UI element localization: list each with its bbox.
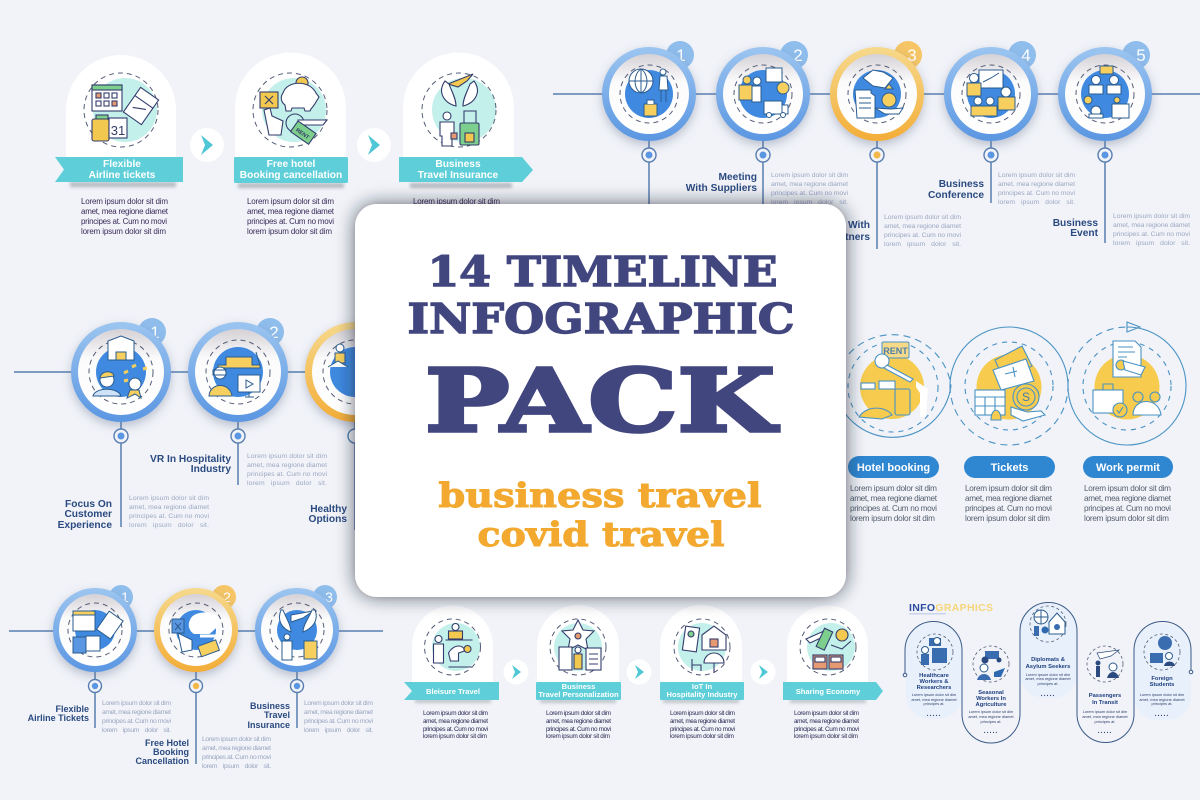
panel: bottom-left airline timeline <box>9 585 383 770</box>
panel: bottom-centre arch timeline <box>404 605 883 740</box>
text block <box>1113 213 1190 247</box>
title: Diplomats & <box>1031 657 1065 663</box>
text block <box>1084 484 1172 523</box>
text block: lorem ipsum dolor sit dim <box>794 733 858 740</box>
text block: amet, mea regione diamet <box>998 181 1075 188</box>
label: Customer <box>64 509 112 520</box>
arrow: play marker <box>1127 322 1140 332</box>
panel: bottom-right infographics capsules <box>903 602 1193 743</box>
ribbon: Business Travel Personalization: Travel Personalization <box>538 690 619 699</box>
body: amet, mea regione diamet <box>1025 676 1072 681</box>
column: Diplomats & Asylum Seekers <box>1025 606 1072 698</box>
arrow: chevron <box>504 660 528 684</box>
text block <box>129 495 209 529</box>
connector stems <box>95 672 297 764</box>
text block: Lorem ipsum dolor sit dim <box>247 453 327 460</box>
text block: Lorem ipsum dolor sit dim <box>202 736 271 743</box>
ribbon: IoT In Hospitality Industry: IoT In <box>692 682 712 691</box>
title: Passengers <box>1089 693 1121 699</box>
text block: amet, mea regione diamet <box>965 494 1053 503</box>
text block <box>202 736 271 770</box>
ribbon: Flexible Airline tickets: Airline tickets <box>89 170 156 181</box>
text block: principes at. Cum no movi <box>670 726 735 733</box>
title <box>917 673 951 691</box>
text block: principes at. Cum no movi <box>247 217 334 226</box>
label: Options <box>309 514 347 525</box>
icon: piggy bank, cancel box and rent key: RENT <box>294 127 311 141</box>
timeline axis <box>553 93 1200 95</box>
step 1: Focus On Customer Experience <box>58 318 209 531</box>
end dots <box>903 670 1193 677</box>
column: Healthcare Workers & Researchers <box>911 634 958 718</box>
text block: lorem ipsum dolor sit. <box>247 480 327 487</box>
label: VR In Hospitality <box>150 454 231 465</box>
icon: calendar, tickets, wallet <box>73 611 123 653</box>
ribbon: Business Travel Insurance: Business <box>435 159 481 170</box>
icon: tractor, farmer <box>977 651 1005 680</box>
pill: Work permit: Work permit <box>1096 462 1160 474</box>
column: Passengers In Transit <box>1082 646 1129 735</box>
icon: star, door, clipboard <box>559 620 601 670</box>
text block <box>771 172 848 206</box>
title: Healthcare <box>919 673 950 679</box>
arrow: chevron 2 <box>357 128 391 162</box>
dots: ..... <box>1098 728 1112 735</box>
label <box>58 499 112 531</box>
text block: lorem ipsum dolor sit. <box>884 241 961 248</box>
icon: keys, money bag, beds <box>806 628 851 669</box>
label: Focus On <box>65 499 112 510</box>
ribbon: Business Travel Insurance: Travel Insurance <box>418 170 499 181</box>
text block: Lorem ipsum dolor sit dim <box>965 484 1052 493</box>
text block: lorem ipsum dolor sit. <box>771 199 848 206</box>
text block: amet, mea regione diamet <box>771 181 848 188</box>
label <box>28 704 89 723</box>
label: Meeting <box>718 172 757 183</box>
text block: lorem ipsum dolor sit dim <box>1084 514 1169 523</box>
text block: amet, mea regione diamet <box>794 718 859 725</box>
body: Lorem ipsum dolor sit dim <box>969 709 1013 714</box>
text block: Lorem ipsum dolor sit dim <box>304 700 373 707</box>
title <box>1150 676 1174 688</box>
icon: piggy bank, rent tag <box>172 612 220 657</box>
text block: lorem ipsum dolor sit dim <box>670 733 734 740</box>
text block: amet, mea regione diamet <box>304 709 373 716</box>
text block: principes at. Cum no movi <box>884 232 961 239</box>
icon: phone, house, umbrella <box>682 626 726 673</box>
body: Lorem ipsum dolor sit dim <box>1140 692 1184 697</box>
step 3: With Partners <box>829 41 961 248</box>
text block: amet, mea regione diamet <box>81 207 169 216</box>
text block: amet, mea regione diamet <box>546 718 611 725</box>
label: Event <box>1070 228 1099 239</box>
timeline axis <box>14 371 360 373</box>
body: amet, mea regione diamet <box>911 697 958 702</box>
text block: principes at. Cum no movi <box>423 726 488 733</box>
text block: lorem ipsum dolor sit dim <box>850 514 935 523</box>
step 3: Business Travel Insurance <box>247 585 373 734</box>
text block: principes at. Cum no movi <box>965 504 1052 513</box>
text block: Lorem ipsum dolor sit dim <box>546 710 611 717</box>
text block: amet, mea regione diamet <box>1113 222 1190 229</box>
body <box>1139 692 1186 706</box>
step card: Business Travel Personalization <box>536 605 621 740</box>
text block: lorem ipsum dolor sit dim <box>81 227 166 236</box>
title <box>976 690 1007 708</box>
label: Conference <box>928 190 984 201</box>
icon: handshake and contract <box>855 70 903 118</box>
step 1: globe and traveller: 1 <box>676 46 686 65</box>
subtitle: covid travel: covid travel <box>478 515 725 555</box>
body: principes at. <box>981 719 1001 724</box>
capsule fills <box>906 604 1191 720</box>
step 4: Business Conference: 4 <box>1021 46 1031 65</box>
icon: VR and sofa <box>209 352 260 397</box>
text block: amet, mea regione diamet <box>850 494 938 503</box>
icon: globe, students <box>1150 636 1175 666</box>
label: Travel <box>264 710 290 720</box>
panel: top-right circular timeline <box>553 41 1200 249</box>
text block <box>998 172 1075 206</box>
body: principes at. <box>924 701 944 706</box>
step 2: VR In Hospitality Industry <box>150 318 327 487</box>
label: Business <box>1053 218 1098 229</box>
text block: Lorem ipsum dolor sit dim <box>1084 484 1171 493</box>
text block: lorem ipsum dolor sit. <box>202 763 271 770</box>
text block: lorem ipsum dolor sit dim <box>247 227 332 236</box>
text block <box>670 710 735 740</box>
title <box>1026 657 1070 670</box>
text block: lorem ipsum dolor sit dim <box>965 514 1050 523</box>
step card: IoT In Hospitality Industry <box>660 605 744 740</box>
label: Airline Tickets <box>28 713 89 723</box>
step 3: With Partners: 3 <box>907 46 917 65</box>
title: Students <box>1150 682 1174 688</box>
body: principes at. <box>1095 719 1115 724</box>
text block: lorem ipsum dolor sit dim <box>423 733 487 740</box>
label <box>686 172 757 194</box>
icon: globe <box>629 69 668 116</box>
title: Workers In <box>976 696 1006 702</box>
step: Tickets <box>950 327 1068 523</box>
step card: Business Travel Insurance <box>399 52 533 216</box>
label: With Suppliers <box>686 183 757 194</box>
step: Hotel booking <box>834 335 951 523</box>
label <box>309 504 347 525</box>
text block: principes at. Cum no movi <box>81 217 167 226</box>
ribbon: Free hotel Booking cancellation: Booking cancellation <box>240 170 342 181</box>
text block <box>304 700 373 734</box>
panel: top-left arch timeline <box>55 52 533 236</box>
subtitle: business travel: business travel <box>438 476 762 516</box>
body: Lorem ipsum dolor sit dim <box>1026 672 1070 677</box>
icon: insurance hands, traveller <box>279 610 317 660</box>
text block: principes at. Cum no movi <box>546 726 611 733</box>
label: Booking <box>153 747 189 757</box>
icon: calendar, tickets and wallet <box>92 85 159 141</box>
text block <box>423 710 488 740</box>
icon: key, phone, map <box>859 342 928 419</box>
step card: Sharing Economy <box>783 606 883 740</box>
text block: lorem ipsum dolor sit. <box>102 727 171 734</box>
label: Business <box>939 179 984 190</box>
text block <box>247 453 327 487</box>
step card: Bleisure Travel <box>404 606 499 740</box>
title <box>1089 693 1121 706</box>
icon: plane, hands, traveller and suitcase <box>440 74 479 146</box>
step 2: Meeting With Suppliers: 2 <box>793 46 803 65</box>
dots: ..... <box>927 711 941 718</box>
text block <box>81 197 169 236</box>
text block: principes at. Cum no movi <box>771 190 848 197</box>
text block: lorem ipsum dolor sit. <box>1113 240 1190 247</box>
text block: principes at. Cum no movi <box>102 718 171 725</box>
arrow: chevron <box>626 660 652 684</box>
icon: medics <box>921 638 947 665</box>
text block: Lorem ipsum dolor sit dim <box>1113 213 1190 220</box>
text block: Lorem ipsum dolor sit dim <box>794 710 859 717</box>
title: Foreign <box>1151 676 1173 682</box>
text block: principes at. Cum no movi <box>129 513 209 520</box>
step: Work permit <box>1068 322 1186 523</box>
text block: lorem ipsum dolor sit. <box>129 522 209 529</box>
text block: amet, mea regione diamet <box>202 745 271 752</box>
text block: Lorem ipsum dolor sit dim <box>81 197 168 206</box>
text block: principes at. Cum no movi <box>850 504 937 513</box>
step card: Flexible Airline tickets <box>55 55 183 236</box>
icon: event network <box>1084 66 1129 118</box>
step 5: Business Event: 5 <box>1136 46 1146 65</box>
text block: Lorem ipsum dolor sit dim <box>670 710 735 717</box>
dots: ..... <box>1041 691 1055 698</box>
text block <box>965 484 1053 523</box>
pill: Hotel booking: Hotel booking <box>857 462 930 474</box>
text block: principes at. Cum no movi <box>1113 231 1190 238</box>
step 3: Business Travel Insurance: 3 <box>325 589 333 605</box>
ribbon: Flexible Airline tickets <box>55 157 183 182</box>
body: principes at. <box>1152 701 1172 706</box>
text block: principes at. Cum no movi <box>998 190 1075 197</box>
pill: Hotel booking <box>848 456 939 478</box>
text block: Lorem ipsum dolor sit dim <box>102 700 171 707</box>
body <box>1082 709 1129 724</box>
ribbon: IoT In Hospitality Industry: Hospitality Industry <box>667 690 738 699</box>
text block <box>850 484 938 523</box>
text block: principes at. Cum no movi <box>202 754 271 761</box>
text block <box>413 197 501 216</box>
text block: principes at. Cum no movi <box>1084 504 1171 513</box>
connector stems <box>121 420 355 530</box>
title: INFOGRAPHIC: INFOGRAPHIC <box>408 295 794 343</box>
title: 14 TIMELINE: 14 TIMELINE <box>428 248 778 296</box>
text block: amet, mea regione diamet <box>884 223 961 230</box>
text block <box>794 710 859 740</box>
text block: amet, mea regione diamet <box>129 504 209 511</box>
text block: Lorem ipsum dolor sit dim <box>413 197 500 206</box>
step 3: Healthy Options <box>305 322 405 525</box>
dots: ..... <box>1155 711 1169 718</box>
icon: piggy bank, cancel box and rent key <box>260 77 327 144</box>
text block: amet, mea regione diamet <box>247 462 327 469</box>
text block: amet, mea regione diamet <box>670 718 735 725</box>
title: Researchers <box>917 685 951 691</box>
pill: Tickets: Tickets <box>991 462 1028 474</box>
label: Partners <box>829 232 870 243</box>
title card <box>355 204 846 597</box>
label: Free Hotel <box>145 738 189 748</box>
step 4: Business Conference <box>928 41 1075 206</box>
body: amet, mea regione diamet <box>1139 697 1186 702</box>
text block: Lorem ipsum dolor sit dim <box>998 172 1075 179</box>
title: Seasonal <box>978 690 1004 696</box>
pill: Work permit <box>1083 456 1173 478</box>
step card: Free hotel Booking cancellation <box>234 52 348 236</box>
icon: hotel and guest <box>93 336 147 398</box>
ribbon: Bleisure Travel: Bleisure Travel <box>426 687 480 696</box>
title: Asylum Seekers <box>1026 664 1070 670</box>
icon: tickets, calendar, coin <box>975 346 1045 421</box>
icon: meditation figure <box>328 344 348 367</box>
label: Experience <box>58 520 112 531</box>
label <box>928 179 984 201</box>
dots: ..... <box>984 728 998 735</box>
arrow: chevron <box>750 660 776 684</box>
text block <box>884 214 961 248</box>
icon: globe, house <box>1034 610 1065 636</box>
step 1: Focus On Customer Experience: 1 <box>150 323 160 342</box>
icon: key, phone, map: RENT <box>883 346 908 356</box>
label: Business <box>250 701 290 711</box>
body <box>968 709 1015 724</box>
text block: lorem ipsum dolor sit. <box>998 199 1075 206</box>
arrow: chevron 1 <box>190 128 224 162</box>
heading: INFOGRAPHICS: INFOGRAPHICS <box>909 602 993 614</box>
icon: calendar, tickets and wallet: 31 <box>111 123 125 138</box>
panel: mid-left hospitality timeline <box>14 318 405 531</box>
step 1: Flexible Airline Tickets: 1 <box>121 589 129 605</box>
text block: amet, mea regione diamet <box>102 709 171 716</box>
ribbon: Flexible Airline tickets: Flexible <box>103 159 141 170</box>
text block: amet, mea regione diamet <box>413 207 501 216</box>
ribbon: Business Travel Personalization <box>536 682 621 700</box>
text block: Lorem ipsum dolor sit dim <box>771 172 848 179</box>
text block <box>546 710 611 740</box>
ribbon: Free hotel Booking cancellation <box>234 157 348 183</box>
label: Flexible <box>55 704 89 714</box>
body: amet, mea regione diamet <box>968 714 1015 719</box>
text block: Lorem ipsum dolor sit dim <box>247 197 334 206</box>
step 2: Meeting With Suppliers <box>686 41 848 206</box>
text block: Lorem ipsum dolor sit dim <box>884 214 961 221</box>
body: principes at. <box>1038 681 1058 686</box>
step 1: Flexible Airline Tickets <box>28 585 171 734</box>
text block: amet, mea regione diamet <box>423 718 488 725</box>
label <box>135 738 189 766</box>
step 1: globe and traveller <box>602 41 696 162</box>
ribbon: Sharing Economy: Sharing Economy <box>796 687 861 696</box>
label: Cancellation <box>135 756 189 766</box>
node <box>642 148 656 162</box>
text block: Lorem ipsum dolor sit dim <box>850 484 937 493</box>
step 2: VR In Hospitality Industry: 2 <box>269 323 279 342</box>
title: Workers & <box>920 679 948 685</box>
text block: principes at. Cum no movi <box>794 726 859 733</box>
title: PACK: PACK <box>425 351 779 452</box>
text block: Lorem ipsum dolor sit dim <box>129 495 209 502</box>
label <box>150 454 231 475</box>
icon: hotel reception, beach <box>434 624 472 667</box>
text block <box>102 700 171 734</box>
body: amet, mea regione diamet <box>1082 714 1129 719</box>
icon: suppliers <box>739 68 789 118</box>
pill: Tickets <box>964 456 1055 478</box>
text block: principes at. Cum no movi <box>304 718 373 725</box>
column: Foreign Students <box>1139 634 1186 718</box>
ribbon: Business Travel Personalization: Business <box>562 682 595 691</box>
label <box>829 220 870 243</box>
body <box>911 692 958 706</box>
text block: principes at. Cum no movi <box>247 471 327 478</box>
ribbon: Business Travel Insurance <box>399 157 533 182</box>
body <box>1025 672 1072 686</box>
ribbon: IoT In Hospitality Industry <box>660 682 744 700</box>
icon: tickets, calendar, coin: S <box>1022 390 1030 404</box>
text block: lorem ipsum dolor sit. <box>304 727 373 734</box>
step 2: Free Hotel Booking Cancellation: 2 <box>223 589 231 605</box>
ribbon: Free hotel Booking cancellation: Free hotel <box>267 159 316 170</box>
label <box>1053 218 1099 239</box>
label <box>247 701 290 730</box>
panel: mid-right travel requirements <box>834 322 1186 523</box>
label: Industry <box>191 464 231 475</box>
step 2: Free Hotel Booking Cancellation <box>135 585 271 770</box>
text block: amet, mea regione diamet <box>247 207 335 216</box>
label: Insurance <box>247 720 290 730</box>
timeline axis <box>9 630 383 632</box>
label: Healthy <box>310 504 347 515</box>
text block: lorem ipsum dolor sit dim <box>546 733 610 740</box>
label: With <box>848 220 870 231</box>
winding outline <box>905 602 1191 743</box>
step 5: Business Event <box>1053 41 1190 247</box>
text block: Lorem ipsum dolor sit dim <box>423 710 488 717</box>
text block: amet, mea regione diamet <box>1084 494 1172 503</box>
title: Agriculture <box>976 702 1007 708</box>
body: Lorem ipsum dolor sit dim <box>912 692 956 697</box>
icon: conference <box>967 70 1015 116</box>
title: In Transit <box>1092 700 1118 706</box>
icon: plane, passengers <box>1096 650 1119 678</box>
body: Lorem ipsum dolor sit dim <box>1083 709 1127 714</box>
connector stems <box>649 141 1105 249</box>
text block <box>247 197 335 236</box>
icon: permit, briefcase, globe <box>1093 341 1161 417</box>
column: Seasonal Workers In Agriculture <box>968 646 1015 735</box>
